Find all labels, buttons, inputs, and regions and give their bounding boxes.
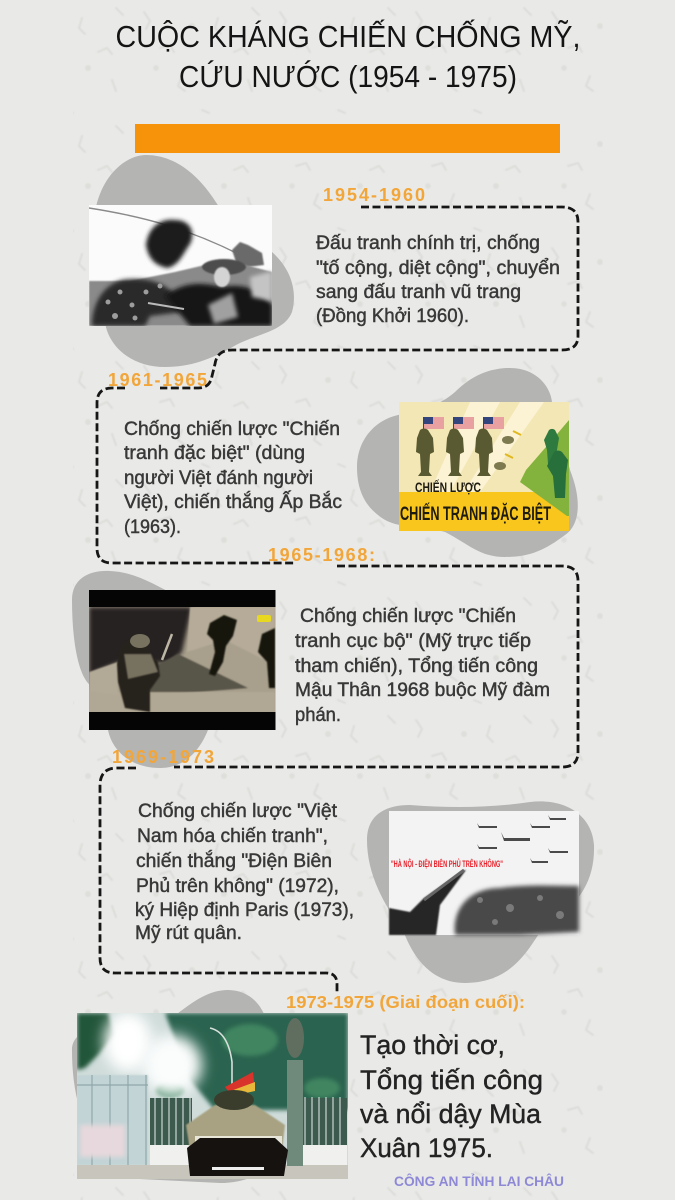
orange bar: [135, 124, 560, 153]
dashed connector: top box: [160, 207, 578, 388]
text block: chiến thắng "Điện Biên: [136, 850, 332, 872]
text block: Chống chiến lược "Việt: [138, 801, 338, 822]
image: chiến tranh đặc biệt poster: CHIẾN LƯỢC: [415, 479, 481, 495]
photo: Hà Nội - Điện Biên Phủ trên không: [389, 811, 579, 935]
text block: Nam hóa chiến tranh",: [137, 826, 328, 847]
text block: phán.: [295, 705, 341, 726]
year label: 1961-1965: [108, 370, 207, 390]
text block: (1963).: [124, 517, 181, 538]
text block: ký Hiệp định Paris (1973),: [135, 900, 354, 921]
text block: Phủ trên không" (1972),: [136, 876, 339, 897]
text block: [135, 801, 354, 944]
forest: [165, 1013, 348, 1110]
text block: Chống chiến lược "Chiến: [124, 419, 340, 440]
photo: soldiers in trench: [89, 205, 272, 326]
blob 3: [72, 571, 208, 768]
gate pillar: [287, 1060, 303, 1166]
text block: người Việt đánh người: [124, 468, 313, 489]
text block: Đấu tranh chính trị, chống: [316, 233, 540, 254]
year label: 1954-1960: [323, 185, 425, 205]
text block: [316, 233, 560, 327]
title: CỨU NƯỚC (1954 - 1975): [179, 59, 517, 94]
text block: [295, 606, 550, 726]
text block: [124, 419, 342, 538]
soldiers with flags: [416, 417, 504, 476]
blob 1: [96, 155, 294, 367]
year label: 1965-1968:: [268, 545, 375, 565]
fences: [150, 1098, 347, 1145]
image: chiến tranh đặc biệt poster: [399, 402, 569, 531]
panel: 1965-1968: [72, 545, 550, 768]
text block: Mỹ rút quân.: [135, 923, 242, 944]
green foliage: [520, 420, 569, 516]
blob 2: [357, 368, 578, 557]
year label: 1969-1973: [112, 747, 214, 767]
panel: 1973-1975: [72, 990, 543, 1183]
text block: sang đấu tranh vũ trang: [316, 282, 521, 303]
left gate: [77, 1075, 148, 1165]
text block: tranh đặc biệt" (dùng: [124, 443, 305, 464]
closing text: Xuân 1975.: [360, 1133, 493, 1163]
dashed connector: third box: [174, 566, 578, 767]
text block: Chống chiến lược "Chiến: [300, 606, 516, 627]
title: [116, 18, 580, 94]
photo: troops landing: [89, 590, 276, 730]
paper texture: [73, 0, 603, 1200]
photo: Hà Nội - Điện Biên Phủ trên không: "HÀ NỘI - ĐIỆN BIÊN PHỦ TRÊN KHÔNG": [391, 858, 503, 870]
footer credit: CÔNG AN TỈNH LAI CHÂU: [394, 1174, 564, 1189]
panel: 1961-1965: [108, 368, 578, 557]
dashed connector: fourth box: [100, 768, 337, 992]
blob 5: [72, 990, 264, 1183]
text block: tham chiến), Tổng tiến công: [295, 656, 538, 677]
text block: Mậu Thân 1968 buộc Mỹ đàm: [295, 680, 550, 701]
year label: 1973-1975 (Giai đoạn cuối):: [286, 992, 525, 1012]
text block: (Đồng Khởi 1960).: [316, 306, 469, 327]
closing text: và nổi dậy Mùa: [360, 1099, 542, 1129]
closing text: Tạo thời cơ,: [360, 1030, 505, 1060]
tank: [186, 1105, 285, 1150]
text block: Việt), chiến thắng Ấp Bắc: [124, 491, 342, 513]
blob 4: [367, 801, 594, 983]
title: CUỘC KHÁNG CHIẾN CHỐNG MỸ,: [116, 18, 580, 54]
closing text: [360, 1030, 543, 1163]
panel: 1969-1973: [112, 747, 594, 983]
text block: tranh cục bộ" (Mỹ trực tiếp: [295, 631, 531, 652]
flag: [225, 1072, 254, 1090]
dashed connector: second box: [97, 388, 295, 563]
image: chiến tranh đặc biệt poster: CHIẾN TRANH ĐẶC BIỆT: [400, 503, 551, 525]
text block: "tố cộng, diệt cộng", chuyển: [316, 258, 560, 279]
closing text: Tổng tiến công: [360, 1065, 543, 1095]
smoke: [104, 1012, 152, 1072]
panel: 1954-1960: [89, 155, 560, 367]
photo: tank at palace gate: [77, 1012, 348, 1179]
